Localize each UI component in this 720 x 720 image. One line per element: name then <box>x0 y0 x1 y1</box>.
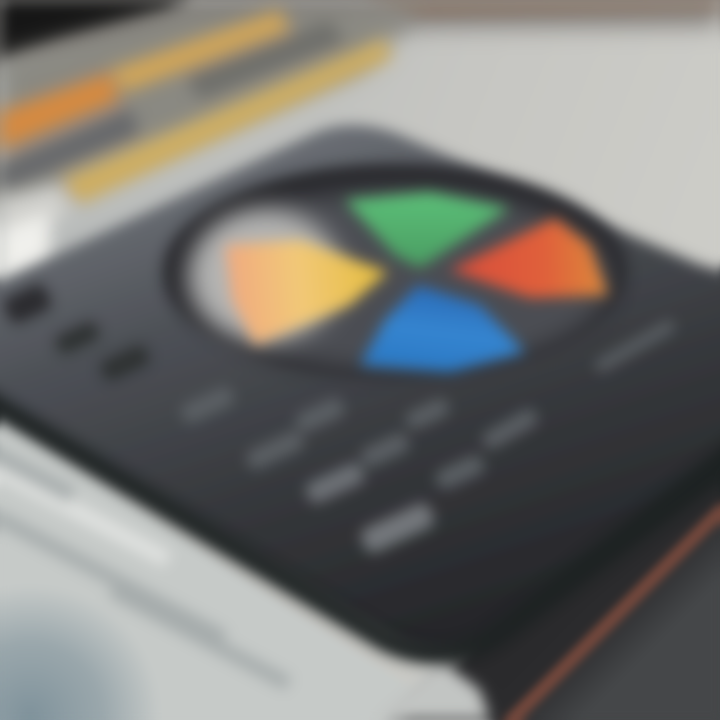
surface: light table strip beside the shadow <box>370 660 490 720</box>
chart: blurred pie chart <box>163 164 627 380</box>
surface: bottom left blue-gray corner <box>0 580 170 720</box>
keys: blurred device buttons <box>1 282 677 555</box>
wedge: blue <box>360 285 525 372</box>
wedge: green <box>345 192 510 268</box>
dial face <box>188 188 612 372</box>
wedge: red and orange <box>450 218 608 298</box>
surface: bottom left paper lines <box>0 433 292 690</box>
panel: dark device body <box>0 125 720 654</box>
stripes: blurred orange and yellow paper bands <box>0 10 392 285</box>
dial left highlight <box>190 209 340 341</box>
wedge: yellow and orange <box>225 240 388 345</box>
panel: lower device edge <box>0 372 720 664</box>
ring: dark dial bezel <box>163 164 627 380</box>
